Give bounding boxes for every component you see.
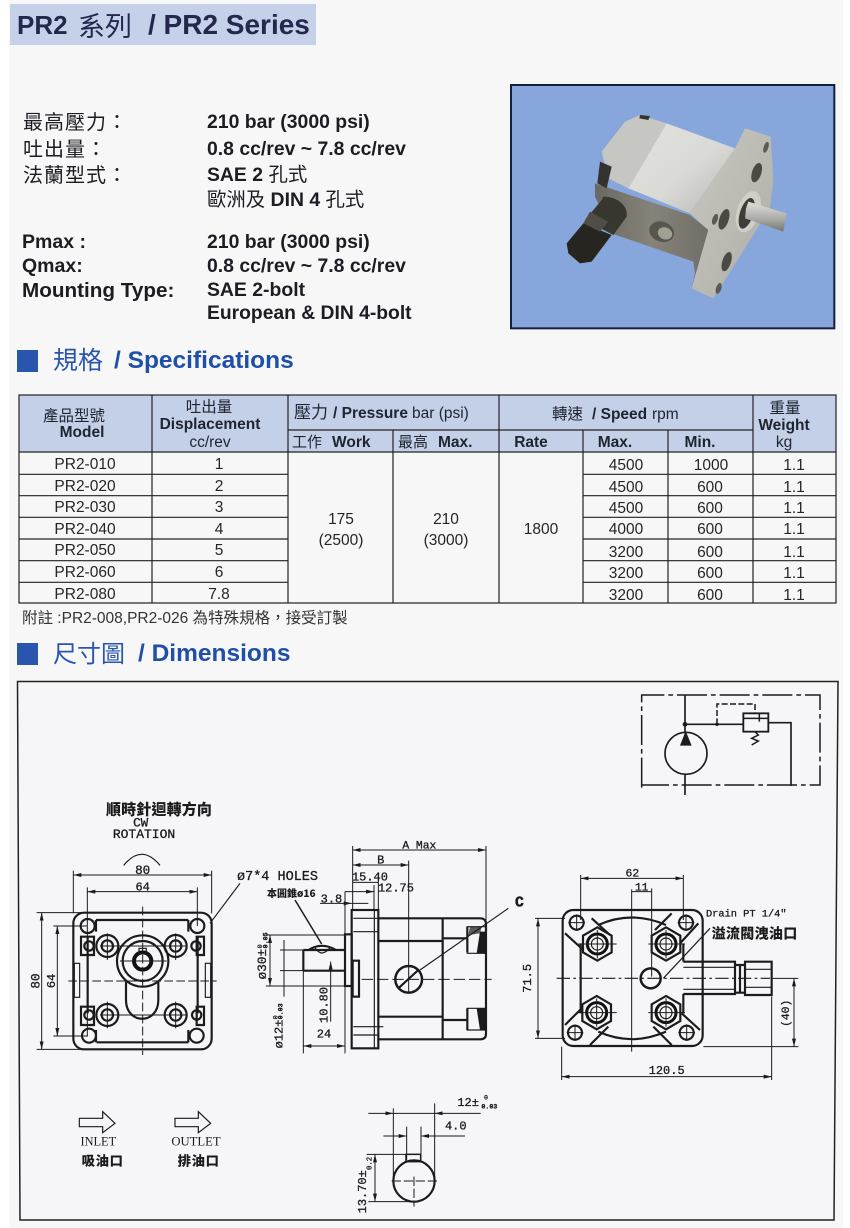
table header: Model — [60, 424, 104, 441]
arrow: outlet: OUTLET — [171, 1135, 221, 1149]
table header: / Pressure — [333, 405, 408, 422]
table header — [19, 395, 836, 452]
table rows: 1.1 — [783, 521, 805, 538]
side view with dimensions: 24 — [317, 1027, 331, 1041]
front view with dimensions: 80 — [135, 863, 150, 878]
side view with dimensions: 0 — [256, 944, 264, 948]
table rows: 3200 — [609, 544, 644, 561]
table rows: 600 — [697, 565, 723, 582]
side view with dimensions: C — [515, 896, 524, 912]
table header: 壓力 — [294, 403, 328, 422]
table rows: PR2-030 — [54, 499, 116, 516]
side view with dimensions — [255, 841, 524, 1053]
front view with dimensions: 64 — [45, 974, 59, 988]
table header: / Speed — [592, 406, 647, 423]
label: holes note: ø7*4 HOLES — [237, 870, 318, 885]
table header: cc/rev — [189, 434, 231, 451]
rear view with dimensions: Drain PT 1/4" — [706, 909, 787, 921]
text block: chinese specs: SAE 2 孔式 — [207, 164, 307, 186]
table rows: PR2-050 — [54, 542, 116, 559]
table rows: 3200 — [609, 565, 644, 582]
table rows: 600 — [697, 521, 723, 538]
shaft key section: 0.2 — [366, 1157, 374, 1170]
table rows: 1 — [215, 456, 223, 473]
table rows: 600 — [697, 544, 723, 561]
heading: dimensions: 尺寸圖 — [53, 641, 125, 668]
text block: chinese specs — [23, 111, 406, 211]
arrow: outlet — [171, 1112, 221, 1169]
table rows: 1.1 — [783, 457, 805, 474]
table header: Weight — [758, 417, 810, 434]
arrow: inlet: 吸油口 — [82, 1150, 124, 1169]
shaft key section — [356, 1093, 497, 1213]
table rows: 6 — [215, 564, 223, 581]
text block: chinese specs: 210 bar (3000 psi) — [207, 111, 370, 133]
table rows: 210 — [433, 511, 459, 528]
side view with dimensions: ø30± — [255, 949, 270, 979]
text block: chinese specs: 吐出量： — [23, 138, 107, 161]
rear view with dimensions: 溢流閥洩油口 — [712, 924, 798, 944]
table header: Max. — [598, 434, 632, 451]
table header: 吐出量 — [186, 398, 232, 416]
text block: chinese specs: 歐洲及 DIN 4 孔式 — [207, 189, 364, 211]
side view with dimensions: ø12± — [273, 1020, 287, 1048]
side view with dimensions: 0.03 — [277, 1003, 285, 1019]
heading: specifications: / Specifications — [114, 347, 294, 374]
table rows: 4500 — [609, 500, 644, 517]
text block: chinese specs: 最高壓力： — [23, 111, 128, 134]
front view with dimensions — [28, 799, 240, 1055]
title — [10, 4, 316, 45]
table header: Max. — [438, 434, 472, 451]
heading: dimensions: / Dimensions — [138, 640, 290, 667]
label: rotation: 順時針迴轉方向 — [106, 799, 212, 820]
table header: Displacement — [160, 416, 260, 433]
text block: english specs: 210 bar (3000 psi) — [207, 231, 370, 253]
table rows: 600 — [697, 479, 723, 496]
text block: english specs: 0.8 cc/rev ~ 7.8 cc/rev — [207, 255, 406, 277]
table rows: 4 — [215, 521, 224, 538]
label: holes note — [237, 870, 318, 900]
table rows: 1.1 — [783, 587, 805, 604]
table header: rpm — [652, 406, 679, 423]
hydraulic circuit symbol — [642, 695, 820, 795]
table rows: 1.1 — [783, 565, 805, 582]
table rows: 1800 — [524, 521, 559, 538]
table header: 轉速 — [552, 405, 584, 423]
table: specifications — [19, 395, 836, 604]
table header: Work — [332, 434, 371, 451]
table rows: PR2-060 — [54, 564, 116, 581]
table rows: PR2-080 — [54, 586, 116, 603]
table header: kg — [776, 434, 792, 451]
shaft key section: 12± — [457, 1096, 479, 1110]
table header: bar (psi) — [412, 405, 469, 422]
table rows: 2 — [215, 478, 223, 495]
shaft key section: 0 — [484, 1093, 488, 1101]
table rows: 4500 — [609, 479, 644, 496]
title: / PR2 Series — [148, 9, 310, 40]
heading: specifications — [17, 347, 294, 375]
photo: gear pump — [511, 85, 834, 328]
rear view with dimensions: 71.5 — [521, 964, 535, 993]
table rows: 600 — [697, 500, 723, 517]
label: rotation: ROTATION — [113, 827, 175, 842]
inlet, outlet arrows and shaft key section — [79, 1093, 497, 1213]
side view with dimensions: 12.75 — [378, 881, 414, 895]
table rows: 1.1 — [783, 500, 805, 517]
text block: english specs: Mounting Type: — [22, 279, 174, 302]
side view with dimensions: 3.8 — [321, 892, 342, 906]
front view with dimensions: 64 — [135, 881, 150, 895]
table rows: 1.1 — [783, 479, 805, 496]
table rows: 175 — [328, 511, 354, 528]
table header: Min. — [684, 434, 716, 451]
table header: 工作 — [292, 434, 322, 451]
table rows: PR2-010 — [54, 456, 116, 473]
heading: specifications: 規格 — [53, 347, 103, 375]
text block: english specs: SAE 2-bolt — [207, 279, 306, 301]
text block: chinese specs: 法蘭型式： — [23, 164, 128, 187]
table rows: PR2-020 — [54, 478, 116, 495]
table rows: (3000) — [424, 532, 468, 549]
table header: 重量 — [769, 399, 801, 417]
table rows: (2500) — [319, 532, 363, 549]
label: rotation: CW — [133, 816, 149, 831]
table rows: 600 — [697, 587, 723, 604]
shaft key section: 0.03 — [481, 1102, 497, 1110]
rear view with dimensions: 11 — [635, 883, 649, 895]
front view with dimensions: 80 — [28, 973, 43, 989]
table rows: 5 — [215, 542, 223, 559]
side view with dimensions: 10.80 — [318, 987, 332, 1023]
label: rotation — [106, 799, 212, 865]
table rows: 1.1 — [783, 544, 805, 561]
rear view with dimensions: 120.5 — [649, 1064, 685, 1078]
title: 系列 — [78, 12, 132, 42]
table rows: 4000 — [609, 521, 644, 538]
text block: english specs — [22, 231, 412, 324]
text block: chinese specs: 0.8 cc/rev ~ 7.8 cc/rev — [207, 138, 406, 160]
footnote: 附註 :PR2-008,PR2-026 為特殊規格，接受訂製 — [22, 609, 348, 627]
table rows: 4500 — [609, 457, 644, 474]
shaft key section: 4.0 — [445, 1119, 467, 1133]
table rows: PR2-040 — [54, 521, 116, 538]
arrow: inlet — [79, 1112, 124, 1169]
rear view with dimensions: (40) — [781, 1000, 793, 1027]
heading: dimensions — [17, 640, 290, 668]
table rows: 3 — [215, 499, 223, 516]
title: PR2 — [17, 10, 68, 40]
text block: english specs: Pmax : — [22, 231, 86, 253]
side view with dimensions: 0.05 — [261, 932, 269, 948]
table header: Rate — [514, 434, 548, 451]
arrow: outlet: 排油口 — [178, 1150, 220, 1169]
shaft key section: 13.70± — [356, 1170, 370, 1213]
panel: dimensions drawing — [18, 682, 838, 1220]
table header: 產品型號 — [43, 407, 105, 425]
table rows: 1000 — [694, 457, 729, 474]
table rows — [54, 456, 805, 604]
side view with dimensions: 0 — [271, 1015, 279, 1019]
text block: english specs: Qmax: — [22, 255, 83, 277]
rear view with dimensions: 62 — [626, 869, 639, 881]
label: holes note: 本圓錐ø16 — [267, 885, 316, 900]
side view with dimensions: B — [377, 854, 384, 868]
table rows: 7.8 — [208, 586, 230, 603]
table rows: 3200 — [609, 587, 644, 604]
side view with dimensions: 15.40 — [352, 871, 388, 885]
arrow: inlet: INLET — [81, 1135, 117, 1149]
rear view with dimensions — [521, 869, 798, 1080]
table header: 最高 — [398, 434, 428, 451]
text block: english specs: European & DIN 4-bolt — [207, 303, 412, 324]
side view with dimensions: A Max — [402, 841, 437, 853]
